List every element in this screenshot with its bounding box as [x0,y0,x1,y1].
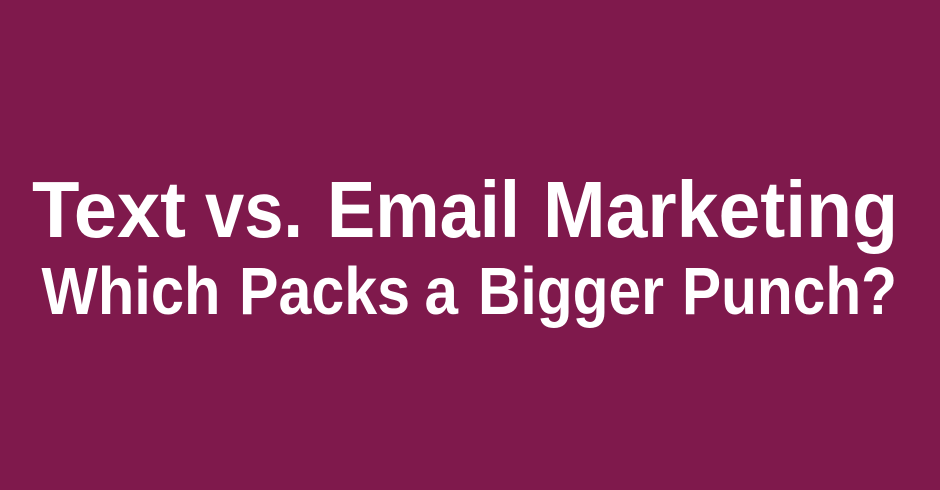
subheading: Which Packs a Bigger Punch? [42,254,897,329]
subheading: Which Packs a Bigger Punch?: Punch? [682,254,897,329]
heading: Text vs. Email Marketing: vs. [205,165,303,254]
heading: Text vs. Email Marketing: Marketing [543,165,898,254]
subheading: Which Packs a Bigger Punch?: Bigger [478,254,664,329]
subheading: Which Packs a Bigger Punch?: a [424,254,459,329]
heading: Text vs. Email Marketing: Email [327,165,520,254]
heading: Text vs. Email Marketing: Text [32,165,186,254]
heading: Text vs. Email Marketing [32,165,898,254]
subheading: Which Packs a Bigger Punch?: Which [42,254,220,329]
subheading: Which Packs a Bigger Punch?: Packs [239,254,410,329]
